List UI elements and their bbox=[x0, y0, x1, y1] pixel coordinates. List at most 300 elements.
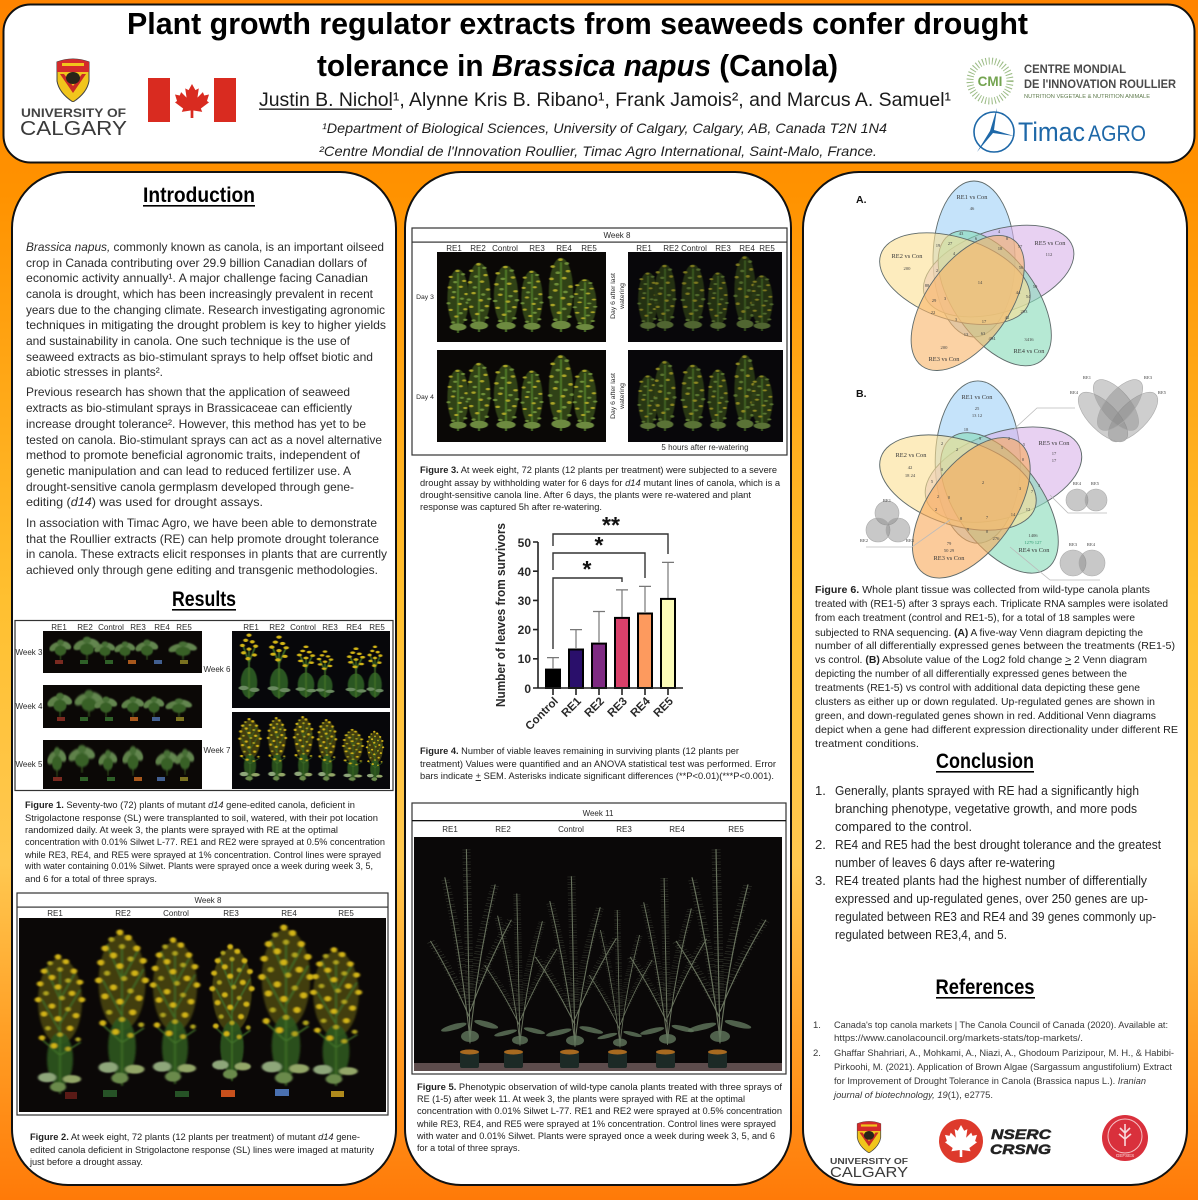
chart: five-way Venn diagram A: 8 bbox=[1006, 236, 1009, 241]
heading: Results: Results bbox=[172, 588, 236, 611]
photo: week 7 bbox=[232, 712, 390, 789]
figure 1: weekly growth photos: Week 4 bbox=[16, 702, 43, 711]
text block: introduction: editing (d14) was used for drought assays. bbox=[26, 495, 263, 509]
chart: five-way Venn diagram B with mini Venns: 18 24 bbox=[905, 473, 916, 478]
mini Venn: RE4 and RE5 bbox=[1066, 489, 1107, 511]
chart: five-way Venn diagram A: 44 bbox=[1016, 290, 1021, 295]
figure 1: weekly growth photos: Week 3 bbox=[16, 648, 43, 657]
logo: CMI: CENTRE MONDIAL bbox=[1024, 62, 1126, 76]
chart: five-way Venn diagram A: 63 bbox=[981, 331, 986, 336]
caption: figure 1: Figure 1. Seventy-two (72) plants of mutant d14 gene-edited canola, deficient in bbox=[25, 800, 355, 811]
chart: five-way Venn diagram A: 200 bbox=[941, 345, 948, 350]
affiliations: ¹Department of Biological Sciences, University of Calgary, Calgary, AB, Canada T2N 1N4 bbox=[322, 120, 887, 136]
figure 3: drought assay photos: watering bbox=[619, 383, 626, 410]
text block: introduction: Brassica napus, commonly known as canola, is an important oilseed bbox=[26, 240, 384, 254]
caption: figure 6: depicting the number of all differentially expressed genes between the bbox=[815, 668, 1127, 680]
error bars bbox=[547, 562, 674, 669]
caption: figure 5: with water and 0.01% Silwet. Plants were sprayed once a week during week 3, 5, and 6 bbox=[416, 1131, 775, 1142]
text block: introduction: abiotic stresses in plants². bbox=[26, 365, 163, 379]
logo: CMI: CMI bbox=[978, 74, 1002, 89]
axis labels: RE3 bbox=[606, 695, 630, 720]
chart: five-way Venn diagram B with mini Venns: RE3 vs Con bbox=[934, 555, 965, 562]
text block: references bbox=[813, 1020, 1174, 1101]
text block: introduction: years due to the changing climate. Research investigating agronomic bbox=[26, 303, 385, 317]
figure 2: week 8 photo: RE3 bbox=[223, 909, 239, 918]
authors: Justin B. Nichol¹, Alynne Kris B. Ribano¹, Frank Jamois², and Marcus A. Samuel¹ bbox=[259, 89, 951, 111]
text block: conclusion list: RE4 treated plants had the highest number of differentially bbox=[835, 873, 1147, 888]
figure 1: weekly growth photos: RE3 bbox=[130, 623, 146, 632]
chart: five-way Venn diagram B with mini Venns: 8 bbox=[960, 516, 963, 521]
caption: figure 6: treatments (RE1-5) vs control with additional data depicting these gene bbox=[815, 682, 1140, 694]
figure 3: drought assay photos: Day 4 bbox=[416, 394, 434, 401]
heading: Conclusion: Conclusion bbox=[936, 750, 1034, 773]
chart: five-way Venn diagram A: 4 bbox=[953, 251, 956, 256]
figure 3: drought assay photos: Week 8 bbox=[604, 231, 631, 240]
caption: figure 6: from each treatment (control and RE1-5), for a total of 18 samples were bbox=[815, 612, 1135, 624]
figure 1: weekly growth photos: Week 5 bbox=[16, 760, 43, 769]
text block: introduction: method to promote beneficial agronomic traits, independent of bbox=[26, 448, 361, 462]
caption: figure 6: number of all differentially expressed genes between the treatments (RE1-5) bbox=[815, 640, 1175, 652]
caption: figure 1: while RE3, RE4, and RE5 were sprayed at 1% concentration. Control lines were sprayed bbox=[24, 850, 381, 861]
caption: figure 2: edited canola deficient in Strigolactone response (SL) lines were imaged at maturity bbox=[30, 1145, 374, 1156]
text block: introduction bbox=[26, 240, 387, 577]
chart: five-way Venn diagram B with mini Venns: 2 bbox=[982, 480, 985, 485]
axis labels: 40 bbox=[518, 565, 531, 579]
photo: week 3 bbox=[43, 631, 202, 673]
figure 1: weekly growth photos: RE1 bbox=[51, 623, 67, 632]
text block: conclusion list: branching phenotype, vegetative growth, and more pods bbox=[835, 801, 1137, 816]
caption: figure 5: Figure 5. Phenotypic observation of wild-type canola plants treated with three sprays of bbox=[417, 1082, 782, 1093]
figure 3: drought assay photos: RE5 bbox=[581, 244, 597, 253]
bar chart: number of leaves from survivors: * bbox=[583, 556, 592, 582]
figure 3: drought assay photos: Control bbox=[492, 244, 518, 253]
chart: five-way Venn diagram B with mini Venns: RE5 bbox=[1158, 390, 1167, 395]
figure 5: week 11 photo: Control bbox=[558, 825, 584, 834]
figure 3: drought assay photos: Day 6 after last bbox=[610, 373, 617, 419]
figure 1: weekly growth photos: Week 7 bbox=[204, 746, 231, 755]
caption: figure 6: vs control. (B) Absolute value of the Log2 fold change > 2 Venn diagram bbox=[815, 654, 1147, 666]
figure 2: week 8 photo: Control bbox=[163, 909, 189, 918]
chart: five-way Venn diagram A: 22 bbox=[931, 310, 936, 315]
chart: five-way Venn diagram B with mini Venns: 2 bbox=[1008, 436, 1011, 441]
chart: five-way Venn diagram A: 18 bbox=[998, 246, 1003, 251]
figure 2: week 8 photo bbox=[17, 893, 388, 1115]
caption: figure 4 bbox=[420, 746, 776, 782]
panel: figures 3 to 5 bbox=[405, 172, 791, 1185]
figure 5: week 11 photo: RE3 bbox=[616, 825, 632, 834]
chart: five-way Venn diagram A: 203 bbox=[1021, 309, 1028, 314]
figure 1: weekly growth photos: Week 6 bbox=[204, 665, 231, 674]
chart: five-way Venn diagram B with mini Venns: 2 bbox=[941, 441, 944, 446]
figure 3: drought assay photos: RE5 bbox=[759, 244, 775, 253]
chart: five-way Venn diagram A: 56 bbox=[1019, 265, 1024, 270]
logo: Timac Agro: Timac bbox=[1018, 117, 1085, 147]
figure 3: drought assay photos: RE3 bbox=[715, 244, 731, 253]
chart: five-way Venn diagram A: 6 bbox=[975, 236, 978, 241]
text block: introduction: extracts as bio-stimulant sprays in Brassicaceae can efficiently bbox=[26, 401, 352, 415]
text block: references: Ghaffar Shahriari, A., Mohkami, A., Niazi, A., Ghodoum Parizipour, M. H., & Habibi- bbox=[834, 1048, 1174, 1059]
text block: conclusion list: regulated between RE3,4, and 5. bbox=[835, 927, 1007, 942]
photo: day 6 bbox=[628, 252, 782, 342]
chart: five-way Venn diagram B with mini Venns: RE1 vs Con bbox=[962, 394, 993, 401]
chart: five-way Venn diagram B with mini Venns: 276 bbox=[993, 536, 1000, 541]
figure 3: drought assay photos: RE1 bbox=[636, 244, 652, 253]
axis labels: 10 bbox=[518, 652, 531, 666]
chart: five-way Venn diagram A: 3 bbox=[955, 317, 958, 322]
chart: five-way Venn diagram A: A. bbox=[856, 194, 867, 206]
chart: five-way Venn diagram B with mini Venns: 13 12 bbox=[972, 413, 983, 418]
chart: five-way Venn diagram B with mini Venns: RE4 bbox=[1073, 481, 1082, 486]
caption: figure 6: Figure 6. Whole plant tissue was collected from wild-type canola plants bbox=[815, 584, 1150, 596]
text block: references: 2. bbox=[813, 1048, 821, 1059]
caption: figure 3: Figure 3. At week eight, 72 plants (12 plants per treatment) were subjected to a severe bbox=[420, 465, 777, 476]
chart: five-way Venn diagram B with mini Venns: 25 bbox=[975, 406, 980, 411]
chart: five-way Venn diagram B with mini Venns: RE2 bbox=[860, 538, 869, 543]
caption: figure 4: bars indicate + SEM. Asterisks indicate significant differences (**P<0.01)(***P<0.001). bbox=[420, 771, 774, 782]
caption: figure 6 bbox=[815, 584, 1178, 750]
chart: five-way Venn diagram B with mini Venns: 0 bbox=[1022, 457, 1025, 462]
chart: five-way Venn diagram A: 4 bbox=[998, 229, 1001, 234]
chart: five-way Venn diagram A: 17 bbox=[982, 319, 987, 324]
chart: five-way Venn diagram B with mini Venns: RE1 bbox=[1083, 375, 1092, 380]
chart: five-way Venn diagram B with mini Venns: RE2 vs Con bbox=[896, 452, 927, 459]
chart: five-way Venn diagram B with mini Venns: 17 bbox=[1052, 458, 1057, 463]
logo: NSERC CRSNG: NSERC bbox=[991, 1126, 1052, 1142]
chart: five-way Venn diagram A: 14 bbox=[978, 280, 983, 285]
text block: conclusion list: 1. bbox=[815, 783, 826, 798]
text block: references: https://www.canolacouncil.org/markets-stats/top-markets/. bbox=[834, 1033, 1083, 1044]
chart: five-way Venn diagram B with mini Venns: RE4 bbox=[1070, 390, 1079, 395]
figure 1: weekly growth photos: RE4 bbox=[154, 623, 170, 632]
figure 5: week 11 photo bbox=[412, 803, 786, 1074]
chart: five-way Venn diagram A: 2 bbox=[936, 268, 939, 273]
text block: references: Canada's top canola markets | The Canola Council of Canada (2020). Available at: bbox=[834, 1020, 1168, 1031]
chart: five-way Venn diagram B with mini Venns: 5 bbox=[1001, 445, 1004, 450]
figure 1: weekly growth photos: Control bbox=[290, 623, 316, 632]
text block: references: 1. bbox=[813, 1020, 821, 1031]
title: Plant growth regulator extracts from seaweeds confer drought bbox=[127, 6, 1028, 41]
mini Venn: RE1, RE2 and RE3 bbox=[866, 501, 910, 542]
text block: introduction: genetic manipulation and can lead to reduced fertilizer use. A bbox=[26, 464, 351, 478]
figure 5: week 11 photo: RE5 bbox=[728, 825, 744, 834]
caption: figure 3: drought assay by withholding water for 6 days for d14 mutant lines of canola, which is a bbox=[420, 478, 781, 489]
figure 3: drought assay photos: RE3 bbox=[529, 244, 545, 253]
panel: header bbox=[4, 4, 1194, 162]
caption: figure 1 bbox=[24, 800, 385, 885]
text block: introduction: In association with Timac Agro, we have been able to demonstrate bbox=[26, 516, 377, 530]
chart: five-way Venn diagram B with mini Venns: 7 bbox=[986, 515, 989, 520]
caption: figure 6: depict when a gene had different expression directionality under different RE bbox=[815, 724, 1178, 736]
text block: conclusion list: number of leaves 6 days after re-watering bbox=[835, 855, 1055, 870]
text block: conclusion list: 3. bbox=[815, 873, 826, 888]
logo: CMI: DE l'INNOVATION ROULLIER bbox=[1024, 77, 1176, 91]
chart: five-way Venn diagram A: RE5 vs Con bbox=[1035, 240, 1066, 247]
mini Venn: four way bbox=[1070, 372, 1166, 450]
chart: five-way Venn diagram B with mini Venns: 1406 bbox=[1028, 533, 1038, 538]
chart: five-way Venn diagram B with mini Venns: 18 bbox=[964, 427, 969, 432]
chart: five-way Venn diagram B with mini Venns: 1279 127 bbox=[1024, 540, 1042, 545]
bar chart: number of leaves from survivors: * bbox=[595, 532, 604, 558]
title: tolerance in Brassica napus (Canola) bbox=[317, 48, 838, 83]
caption: figure 6: treated with (RE1-5) after 3 sprays each. Triplicate RNA samples were isolated bbox=[815, 598, 1168, 610]
chart: five-way Venn diagram A: RE2 vs Con bbox=[892, 253, 923, 260]
figure 3: drought assay photos: RE2 bbox=[470, 244, 486, 253]
figure 1: weekly growth photos: RE2 bbox=[77, 623, 93, 632]
title bbox=[127, 6, 1028, 83]
text block: introduction: increase drought tolerance². However, this method has yet to be bbox=[26, 417, 366, 431]
heading: Introduction: Introduction bbox=[143, 184, 255, 207]
figure 3: drought assay photos: RE1 bbox=[446, 244, 462, 253]
text block: introduction: that the Roullier extracts (RE) can help promote drought tolerance bbox=[26, 532, 379, 546]
axis labels: 30 bbox=[518, 594, 531, 608]
chart: five-way Venn diagram B with mini Venns: 0 bbox=[948, 495, 951, 500]
figure 3: drought assay photos: RE4 bbox=[739, 244, 755, 253]
chart: five-way Venn diagram B with mini Venns: RE4 bbox=[1087, 542, 1096, 547]
chart: five-way Venn diagram A bbox=[856, 181, 1085, 390]
chart: five-way Venn diagram B with mini Venns: RE3 bbox=[1144, 375, 1153, 380]
figure 1: weekly growth photos: Control bbox=[98, 623, 124, 632]
chart: five-way Venn diagram B with mini Venns: 5 bbox=[1023, 442, 1026, 447]
chart: five-way Venn diagram B with mini Venns: 9 bbox=[979, 436, 982, 441]
chart: five-way Venn diagram A: 494 bbox=[989, 336, 996, 341]
text block: conclusion list: expressed and up-regulated genes, over 250 genes are up- bbox=[835, 891, 1148, 906]
text block: introduction: crop in Canada contributing over 29.9 billion Canadian dollars of bbox=[26, 256, 368, 270]
figure 1: weekly growth photos: RE3 bbox=[322, 623, 338, 632]
figure 3: drought assay photos bbox=[412, 228, 787, 455]
caption: figure 5: RE (1-5) after week 11. At week 3, the plants were sprayed with RE at the optimal bbox=[417, 1094, 745, 1105]
chart: five-way Venn diagram A: 3416 bbox=[1024, 337, 1034, 342]
caption: figure 2: Figure 2. At week eight, 72 plants (12 plants per treatment) of mutant d14 gene- bbox=[30, 1132, 360, 1143]
text block: references: for Improvement of Drought Tolerance in Canola (Brassica napus L.). Iranian bbox=[834, 1076, 1146, 1087]
caption: figure 6: green, and down-regulated genes shown in red. Additional Venn diagrams bbox=[815, 710, 1156, 722]
axis labels: RE1 bbox=[560, 695, 584, 720]
figure 3: drought assay photos: Day 3 bbox=[416, 294, 434, 301]
chart: five-way Venn diagram B with mini Venns: 3 bbox=[1038, 483, 1041, 488]
caption: figure 3: response was captured 5h after re-watering. bbox=[420, 502, 602, 513]
text block: references: journal of biotechnology, 19(1), e2775. bbox=[832, 1090, 993, 1101]
logo: University of Calgary bbox=[20, 59, 127, 140]
text block: introduction: in canola. These extracts elicit responses in plants that are currently bbox=[26, 547, 387, 561]
chart: five-way Venn diagram B with mini Venns: 5 bbox=[931, 479, 934, 484]
figure 1: weekly growth photos: RE2 bbox=[269, 623, 285, 632]
axis labels: 50 bbox=[518, 536, 531, 550]
figure 3: drought assay photos: Control bbox=[681, 244, 707, 253]
caption: figure 4: Figure 4. Number of viable leaves remaining in surviving plants (12 plants per bbox=[420, 746, 739, 757]
bar chart: number of leaves from survivors: ** bbox=[602, 512, 620, 538]
figure 5: week 11 photo: Week 11 bbox=[583, 809, 614, 818]
chart: five-way Venn diagram A: 19 bbox=[936, 243, 941, 248]
figure 2: week 8 photo: RE2 bbox=[115, 909, 131, 918]
photo: day 3 bbox=[437, 252, 606, 342]
chart: five-way Venn diagram B with mini Venns: 17 bbox=[1052, 451, 1057, 456]
chart: five-way Venn diagram B with mini Venns: 12 bbox=[1026, 507, 1031, 512]
axis labels: RE2 bbox=[583, 695, 607, 720]
photo: week 5 bbox=[43, 740, 202, 789]
chart: five-way Venn diagram B with mini Venns: B. bbox=[856, 388, 867, 400]
chart: five-way Venn diagram A: 46 bbox=[970, 206, 975, 211]
text block: introduction: achieved only through gene editing and transgenic methodologies. bbox=[26, 563, 378, 577]
text block: introduction: seaweed extracts as bio-stimulant sprays to help offset biotic and bbox=[26, 350, 373, 364]
logo: GEFSES seal: GEFSES bbox=[1116, 1153, 1134, 1158]
figure 5: week 11 photo: RE1 bbox=[442, 825, 458, 834]
caption: figure 2 bbox=[29, 1132, 374, 1168]
logo: GEFSES seal bbox=[1102, 1115, 1148, 1161]
figure 3: drought assay photos: watering bbox=[619, 283, 626, 310]
chart: five-way Venn diagram A: 13 bbox=[964, 332, 969, 337]
axis labels: 0 bbox=[524, 682, 531, 696]
caption: figure 6: clusters as either up or down regulated. Up-regulated genes are shown in bbox=[815, 696, 1155, 708]
chart: five-way Venn diagram B with mini Venns: 0 bbox=[986, 529, 989, 534]
text block: introduction: drought-sensitive canola germplasm developed through gene- bbox=[26, 480, 354, 494]
chart: five-way Venn diagram B with mini Venns: RE5 vs Con bbox=[1039, 440, 1070, 447]
figure 5: week 11 photo: RE4 bbox=[669, 825, 685, 834]
figure 3: drought assay photos: RE4 bbox=[556, 244, 572, 253]
chart: five-way Venn diagram B with mini Venns: 3 bbox=[1019, 486, 1022, 491]
axes bbox=[533, 542, 683, 695]
chart: five-way Venn diagram B with mini Venns: 50 29 bbox=[944, 548, 955, 553]
figure 1: weekly growth photos bbox=[15, 620, 393, 790]
text block: introduction: tested on canola. Bio-stimulant sprays can act as a novel alternative bbox=[26, 433, 382, 447]
mini Venn: RE3 and RE4 bbox=[1060, 550, 1105, 576]
axis labels: RE4 bbox=[629, 695, 653, 720]
text block: introduction: Previous research has shown that the application of seaweed bbox=[26, 385, 350, 399]
logo: University of Calgary footer: UNIVERSITY OF bbox=[830, 1156, 908, 1166]
logo: CMI: NUTRITION VEGETALE & NUTRITION ANIMALE bbox=[1024, 94, 1150, 100]
connector lines bbox=[866, 408, 1107, 580]
chart: five-way Venn diagram B with mini Venns: 2 bbox=[935, 507, 938, 512]
caption: figure 3: drought-sensitive canola line. After 6 days, the plants were re-watered and plant bbox=[420, 490, 751, 501]
text block: conclusion list bbox=[815, 783, 1161, 942]
chart: five-way Venn diagram B with mini Venns: 0 bbox=[941, 467, 944, 472]
chart: five-way Venn diagram B with mini Venns: RE3 bbox=[906, 538, 915, 543]
text block: introduction: canola is drought, which has been increasingly prevalent in recent bbox=[26, 287, 374, 301]
chart: five-way Venn diagram A: 50 bbox=[1033, 284, 1038, 289]
chart: five-way Venn diagram A: RE4 vs Con bbox=[1014, 348, 1045, 355]
logo: Timac Agro: AGRO bbox=[1088, 121, 1146, 146]
logo: University of Calgary footer bbox=[830, 1121, 908, 1181]
text block: introduction: techniques in mitigating the drought problem is key to higher yields bbox=[26, 318, 386, 332]
chart bars bbox=[546, 599, 675, 688]
chart: five-way Venn diagram A: 88 bbox=[925, 283, 930, 288]
figure 2: week 8 photo: RE4 bbox=[281, 909, 297, 918]
chart: five-way Venn diagram B with mini Venns: RE3 bbox=[1069, 542, 1078, 547]
bar chart: number of leaves from survivors bbox=[493, 512, 683, 733]
caption: figure 1: with water containing 0.01% Silwet. Plants were sprayed once a week during week 3, 5, bbox=[24, 861, 373, 872]
chart: five-way Venn diagram A: 200 bbox=[904, 266, 911, 271]
chart: five-way Venn diagram B with mini Venns: 9 bbox=[967, 527, 970, 532]
figure 2: week 8 photo: RE5 bbox=[338, 909, 354, 918]
chart: five-way Venn diagram B with mini Venns: 2 bbox=[956, 447, 959, 452]
chart: five-way Venn diagram A: 29 bbox=[932, 298, 937, 303]
significance brackets bbox=[553, 534, 668, 649]
caption: figure 5: concentration with 0.01% Silwet L-77. RE1 and RE2 were sprayed at 0.5% concentration bbox=[417, 1106, 782, 1117]
logo: NSERC CRSNG: CRSNG bbox=[990, 1141, 1051, 1157]
panel: introduction and results bbox=[12, 172, 396, 1185]
logo: University of Calgary footer: CALGARY bbox=[830, 1164, 908, 1181]
photo: day 4 bbox=[437, 350, 606, 442]
text block: introduction: and sustainability in canola. One such technique is the use of bbox=[26, 334, 351, 348]
photo: week 6 bbox=[232, 631, 390, 708]
logo: Timac Agro bbox=[974, 108, 1146, 152]
axis labels: RE5 bbox=[652, 695, 676, 720]
figure 1: weekly growth photos: RE4 bbox=[346, 623, 362, 632]
caption: figure 1: Strigolactone response (SL) were transplanted to soil, watered, with their pot location bbox=[25, 813, 378, 824]
axis labels: Control bbox=[524, 695, 561, 733]
axis labels bbox=[518, 536, 676, 733]
chart: five-way Venn diagram B with mini Venns: 14 bbox=[1011, 512, 1016, 517]
text block: conclusion list: compared to the control. bbox=[835, 819, 972, 834]
caption: figure 2: just before a drought assay. bbox=[29, 1157, 143, 1168]
chart: five-way Venn diagram B with mini Venns: RE4 vs Con bbox=[1019, 547, 1050, 554]
caption: figure 6: treatment conditions. bbox=[815, 738, 919, 750]
text block: conclusion list: 2. bbox=[815, 837, 826, 852]
text block: conclusion list: regulated between RE3 and RE4 and 39 genes commonly up- bbox=[835, 909, 1156, 924]
chart: five-way Venn diagram A: RE1 vs Con bbox=[957, 194, 988, 201]
bar chart: number of leaves from survivors: Number of leaves from survivors bbox=[493, 523, 508, 707]
caption: figure 1: randomized daily. At week 3, the plants were sprayed with RE at the optimal bbox=[25, 825, 338, 836]
logo: CMI bbox=[970, 61, 1176, 101]
logo: University of Calgary: UNIVERSITY OF bbox=[21, 108, 126, 120]
photo: after re-watering bbox=[628, 350, 783, 442]
caption: figure 5 bbox=[416, 1082, 782, 1154]
logo: University of Calgary: CALGARY bbox=[20, 118, 127, 140]
text block: introduction: economic activity annually¹. A major challenge facing Canadian bbox=[26, 271, 368, 285]
caption: figure 4: treatment) Values were quantified and an ANOVA statistical test was performed. Error bbox=[420, 759, 776, 770]
caption: figure 1: concentration with 0.01% Silwet L-77. RE1 and RE2 were sprayed at 0.5% concentration bbox=[25, 837, 385, 848]
text block: conclusion list: RE4 and RE5 had the best drought tolerance and the greatest bbox=[835, 837, 1161, 852]
chart: five-way Venn diagram B with mini Venns bbox=[856, 372, 1167, 598]
text block: conclusion list: Generally, plants sprayed with RE had a significantly high bbox=[835, 783, 1139, 798]
figure 3: drought assay photos: Day 6 after last bbox=[610, 273, 617, 319]
caption: figure 5: for a total of three sprays. bbox=[417, 1143, 520, 1154]
figure 3: drought assay photos: 5 hours after re-watering bbox=[661, 443, 749, 452]
chart: five-way Venn diagram A: 3 bbox=[944, 296, 947, 301]
caption: figure 6: subjected to RNA sequencing. (A) A five-way Venn diagram depicting the bbox=[815, 627, 1143, 639]
figure 5: week 11 photo: RE2 bbox=[495, 825, 511, 834]
chart: five-way Venn diagram A: 27 bbox=[948, 241, 953, 246]
icon: Canadian flag bbox=[148, 78, 236, 122]
chart: five-way Venn diagram B with mini Venns: RE1 bbox=[883, 498, 892, 503]
heading: References: References bbox=[936, 976, 1034, 999]
chart: five-way Venn diagram A: 42 bbox=[1005, 315, 1010, 320]
chart: five-way Venn diagram A: 112 bbox=[1046, 252, 1053, 257]
chart: five-way Venn diagram B with mini Venns: 42 bbox=[908, 465, 913, 470]
affiliations: ²Centre Mondial de l'Innovation Roullier, Timac Agro International, Saint-Malo, France. bbox=[319, 143, 877, 159]
chart: five-way Venn diagram A: RE3 vs Con bbox=[929, 356, 960, 363]
chart: five-way Venn diagram B with mini Venns: 2 bbox=[937, 494, 940, 499]
affiliations bbox=[319, 120, 887, 159]
figure 2: week 8 photo: RE1 bbox=[47, 909, 63, 918]
chart: five-way Venn diagram B with mini Venns: 79 bbox=[947, 541, 952, 546]
figure 1: weekly growth photos: RE5 bbox=[369, 623, 385, 632]
chart: five-way Venn diagram A: 57 bbox=[1018, 244, 1023, 249]
figure 3: drought assay photos: RE2 bbox=[663, 244, 679, 253]
chart: five-way Venn diagram B with mini Venns: 7 bbox=[1031, 489, 1034, 494]
figure 1: weekly growth photos: RE1 bbox=[243, 623, 259, 632]
chart: five-way Venn diagram B with mini Venns: RE5 bbox=[1091, 481, 1100, 486]
caption: figure 5: while RE3, RE4, and RE5 were sprayed at 1% concentration. Control lines were sprayed bbox=[416, 1119, 776, 1130]
figure 1: weekly growth photos: RE5 bbox=[176, 623, 192, 632]
chart: five-way Venn diagram A: 43 bbox=[959, 231, 964, 236]
panel: Venn diagrams, conclusion and references bbox=[803, 172, 1187, 1185]
axis labels: 20 bbox=[518, 623, 531, 637]
caption: figure 1: and 6 for a total of three sprays. bbox=[25, 874, 157, 885]
text block: references: Pirkoohi, M. (2021). Application of Brown Algae (Sargassum angustifolium) Extract bbox=[834, 1062, 1172, 1073]
logo: NSERC CRSNG bbox=[939, 1119, 1052, 1163]
caption: figure 3 bbox=[420, 465, 781, 513]
photo: week 4 bbox=[43, 685, 202, 728]
figure 2: week 8 photo: Week 8 bbox=[195, 896, 222, 905]
